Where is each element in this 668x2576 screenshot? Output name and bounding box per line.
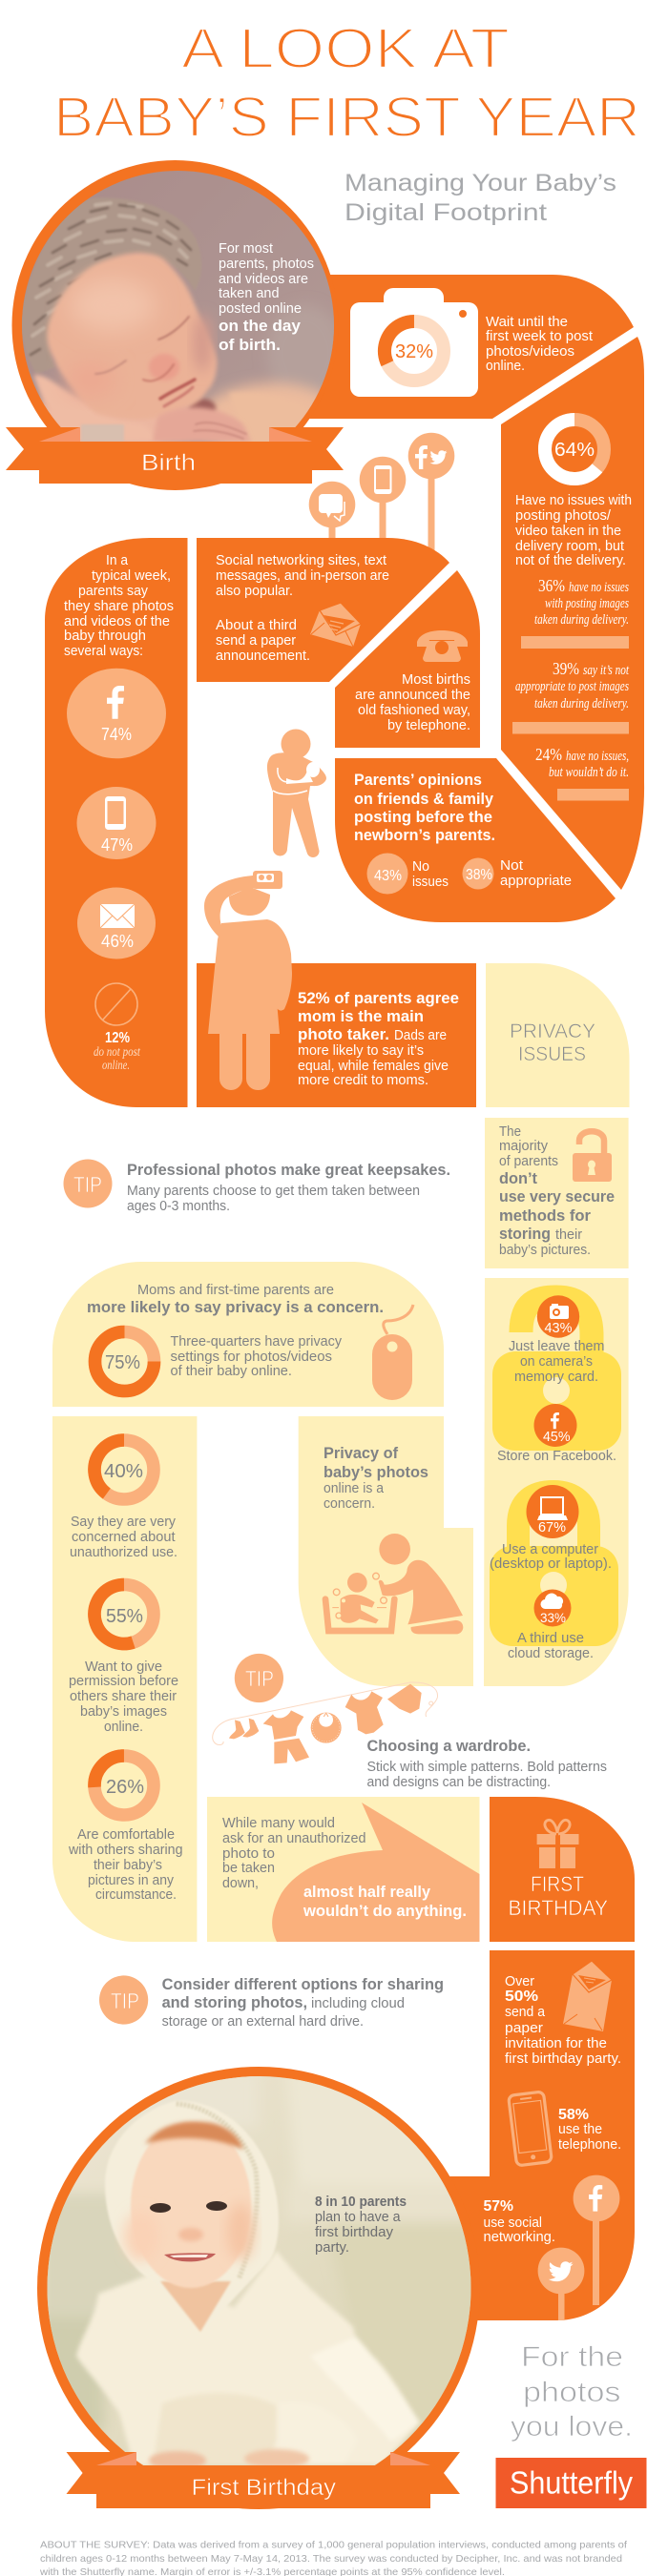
text: on the day of birth: For most <box>219 241 273 257</box>
panel: mom main photo taker <box>197 871 476 1107</box>
text: majority do not use secure: their <box>555 1227 582 1243</box>
text: wait until first week <box>486 315 593 374</box>
tagline: For the <box>521 2341 623 2373</box>
text: give permission: permission before <box>69 1674 178 1689</box>
tip: sharing and storing: including cloud <box>311 1996 405 2011</box>
stat: phone 47 <box>76 787 157 859</box>
text: wait until first week: first week to post <box>486 329 593 344</box>
text: majority do not use secure <box>499 1124 615 1258</box>
stat: 38 not appropriate: appropriate <box>500 874 572 889</box>
text: 8 in 10 parents: first birthday <box>315 2225 394 2240</box>
text: three-quarters: Three-quarters have privacy <box>170 1334 343 1350</box>
text: 57 percent social: 57% <box>483 2198 513 2215</box>
stat: memory card 43: memory card. <box>514 1370 598 1385</box>
text: wait until first week: Wait until the <box>486 315 568 330</box>
text: most births: by telephone. <box>387 718 470 733</box>
text: majority do not use secure: The <box>499 1124 521 1140</box>
text: privacy of photos <box>324 1445 428 1512</box>
chart: 75 donut: 75% <box>105 1352 140 1373</box>
text: most births: are announced the <box>355 688 470 703</box>
text: majority do not use secure: baby’s pictures. <box>499 1243 591 1258</box>
text: most births: Most births <box>402 672 470 688</box>
text: comfortable: circumstance. <box>95 1887 177 1903</box>
icon: camera <box>350 288 478 397</box>
text: 58 percent telephone <box>558 2107 621 2153</box>
tip: sharing and storing: Consider different options for sharing <box>162 1976 444 1993</box>
chart: 24 percent bar: 24% <box>535 745 562 764</box>
text: unauthorized use <box>70 1515 177 1560</box>
text: give permission: Want to give <box>85 1659 162 1675</box>
stat: cloud 33: A third use <box>517 1631 584 1646</box>
stat: mail 46: 46% <box>101 932 134 951</box>
text: privacy of photos: online is a <box>324 1481 385 1496</box>
text: social networking: announcement. <box>216 649 310 664</box>
text: on the day of birth: posted online <box>219 301 302 317</box>
tip badge: wardrobe: TIP <box>245 1666 274 1691</box>
panel: first birthday photo <box>37 2067 487 2509</box>
stat: memory card 43: 43% <box>544 1321 573 1336</box>
icon: yellow padlock two <box>490 1492 618 1646</box>
text: social networking: send a paper <box>216 633 296 649</box>
panel: storage options <box>484 1278 629 1686</box>
text: 8 in 10 parents: plan to have a <box>315 2210 401 2225</box>
icon: twitter lollipop <box>538 2248 584 2320</box>
text: over 50 percent: send a <box>505 2005 546 2020</box>
text: in a typical week <box>64 553 174 659</box>
stat: facebook 74 <box>67 669 166 758</box>
facial features <box>95 317 246 439</box>
banner: Birth <box>6 427 344 484</box>
panel: camera wait stat <box>286 275 634 419</box>
text: on the day of birth: parents, photos <box>219 257 314 272</box>
stat: cloud 33: cloud storage. <box>508 1646 594 1661</box>
text: more likely privacy concern <box>87 1283 384 1316</box>
panel: moms and first-time parents <box>52 1262 444 1407</box>
stat: 38 not appropriate: 38% <box>466 867 492 883</box>
text: wait until first week: photos/videos <box>486 344 574 360</box>
icon: parent holding baby <box>267 729 326 857</box>
text: most births: old fashioned way, <box>358 703 470 718</box>
chart: 39 percent bar: 39% <box>553 659 579 678</box>
text: no issues with posting: video taken in the <box>515 524 621 539</box>
text: privacy of photos: baby’s photos <box>324 1464 428 1481</box>
panel: privacy issues heading: ISSUES <box>518 1043 586 1065</box>
panel: first birthday heading: FIRST <box>531 1872 584 1896</box>
stat: computer 67 <box>490 1485 612 1572</box>
icon: facebook lollipop <box>574 2175 619 2305</box>
chart: 36 percent bar <box>521 576 629 649</box>
text: over 50 percent <box>505 1974 621 2067</box>
text: majority do not use secure: use very secure <box>499 1188 615 1206</box>
text: on the day of birth: and videos are <box>219 272 308 287</box>
arm and shoulder <box>34 375 310 442</box>
chart: 36 percent bar: with posting images <box>545 596 629 611</box>
text: 8 in 10 parents <box>315 2195 407 2256</box>
text: wait until first week: online. <box>486 359 525 374</box>
text: social networking: About a third <box>216 618 297 633</box>
chart: 39 percent bar: say it’s not <box>583 663 630 678</box>
stat: memory card 43: on camera’s <box>520 1354 593 1370</box>
chart: 36 percent bar: 36% <box>538 576 565 595</box>
text: almost half: wouldn’t do anything. <box>303 1903 467 1920</box>
text: give permission: baby’s images <box>80 1704 167 1720</box>
text: privacy of photos: concern. <box>324 1496 375 1512</box>
icon: gift <box>537 1820 578 1868</box>
icon: rotary telephone <box>417 630 468 662</box>
title: BABY’S FIRST YEAR <box>53 86 640 149</box>
text: 52 percent mom: mom is the main <box>298 1008 424 1025</box>
text: more likely privacy concern: Moms and first-time parents are <box>137 1283 334 1298</box>
panel: 64 percent delivery room <box>501 337 644 890</box>
tip: professional photos: ages 0-3 months. <box>127 1199 230 1214</box>
text: unauthorized use: unauthorized use. <box>70 1545 177 1560</box>
text: in a typical week: In a <box>106 553 129 568</box>
stat: cloud 33 <box>508 1589 594 1661</box>
heading: parents opinions: on friends & family <box>354 791 494 808</box>
text: many would ask: down, <box>222 1876 259 1891</box>
text: on the day of birth <box>219 241 314 354</box>
panel: telephone announcement <box>335 570 480 748</box>
text: over 50 percent: Over <box>505 1974 534 1989</box>
text: social networking <box>216 553 389 664</box>
chart: 40 donut: 40% <box>104 1461 143 1482</box>
tip text: wardrobe: Choosing a wardrobe. <box>366 1738 531 1755</box>
sweater <box>76 2251 420 2465</box>
text: in a typical week: several ways: <box>64 644 143 659</box>
footer: about the survey: ABOUT THE SURVEY: Data was derived from a survey of 1,000 general population interviews, conducted among parents of <box>40 2539 627 2550</box>
stat: mail 46 <box>77 887 156 959</box>
text: 8 in 10 parents: 8 in 10 parents <box>315 2195 407 2210</box>
text: on the day of birth: taken and <box>219 286 279 301</box>
text: no issues with posting: delivery room, but <box>515 539 624 554</box>
text: no issues with posting: Have no issues with <box>515 493 632 508</box>
panel: social networking <box>197 538 449 682</box>
text: more likely privacy concern: more likely to say privacy is a concern. <box>87 1299 384 1316</box>
stat: facebook 45 <box>497 1404 616 1464</box>
text: in a typical week: baby through <box>64 629 146 644</box>
icon: envelope <box>310 603 361 647</box>
banner: First Birthday: First Birthday <box>191 2475 336 2501</box>
subtitle: Managing Your Baby’s <box>344 170 616 196</box>
text: many would ask <box>222 1816 366 1891</box>
text: 58 percent telephone: telephone. <box>558 2137 621 2153</box>
tagline <box>511 2341 633 2442</box>
text: over 50 percent: paper <box>505 2021 543 2036</box>
text: 52 percent mom: Dads are <box>394 1028 447 1043</box>
text: many would ask: While many would <box>222 1816 335 1831</box>
icon: facebook and twitter lollipop <box>408 433 454 551</box>
stat: facebook 74: 74% <box>101 725 132 744</box>
text: give permission: others share their <box>70 1689 177 1704</box>
text: unauthorized use: Say they are very <box>71 1515 177 1530</box>
panel: privacy issues heading <box>486 963 630 1107</box>
tip: professional photos: Professional photos make great keepsakes. <box>127 1162 450 1179</box>
stat: facebook 45: 45% <box>543 1430 571 1445</box>
icon: invitation envelope <box>563 1961 612 2031</box>
text: three-quarters: of their baby online. <box>170 1364 292 1379</box>
chart: 64 donut <box>532 407 616 491</box>
chart: 40 donut <box>83 1429 165 1511</box>
tip: professional photos <box>63 1160 450 1214</box>
hands <box>149 2449 309 2470</box>
subtitle: Digital Footprint <box>344 199 547 226</box>
panel: parents opinions <box>335 758 616 922</box>
text: 52 percent mom: equal, while females give <box>298 1059 449 1074</box>
panel: weekly sharing ways <box>45 538 187 1107</box>
text: majority do not use secure: majority <box>499 1139 549 1154</box>
title <box>53 17 640 149</box>
stat: facebook 45: Store on Facebook. <box>497 1449 616 1464</box>
text: in a typical week: they share photos <box>64 599 174 614</box>
tip: professional photos: Many parents choose to get them taken between <box>127 1184 420 1199</box>
text: on the day of birth: of birth. <box>219 337 281 354</box>
panel: secure methods lock <box>485 1118 629 1268</box>
panel: privacy issues heading: PRIVACY <box>510 1020 595 1042</box>
tip: sharing and storing: storage or an external hard drive. <box>162 2014 364 2030</box>
text: over 50 percent: invitation for the <box>505 2036 607 2051</box>
stat: memory card 43 <box>509 1295 605 1385</box>
icon: phone lollipop <box>360 457 406 539</box>
hat <box>22 199 134 340</box>
panel: birth photo <box>11 160 344 490</box>
text: social networking: messages, and in-person are <box>216 568 389 584</box>
text: most births <box>355 672 470 733</box>
tip: professional photos: TIP <box>73 1172 102 1197</box>
subtitle <box>344 170 616 226</box>
face <box>124 2122 254 2288</box>
chart: 39 percent bar: taken during delivery. <box>534 696 629 711</box>
eyes and mouth <box>150 2201 227 2261</box>
text: almost half: almost half really <box>303 1884 431 1901</box>
neck <box>160 2281 231 2332</box>
text: in a typical week: typical week, <box>92 568 171 584</box>
text: 52 percent mom: more likely to say it’s <box>298 1043 424 1059</box>
stat: 43 no issues: issues <box>412 875 449 890</box>
chart: 39 percent bar: appropriate to post images <box>515 679 629 694</box>
text: majority do not use secure: methods for <box>499 1207 592 1225</box>
tip: sharing and storing: and storing photos, <box>162 1994 307 2011</box>
hood <box>105 2102 279 2305</box>
stat: do not post 12: do not post <box>94 1045 141 1060</box>
text: social networking: Social networking sites, text <box>216 553 386 568</box>
panel: first birthday heading: BIRTHDAY <box>508 1896 608 1920</box>
text: no issues with posting: not of the delivery. <box>515 553 626 568</box>
stat: 43 no issues: 43% <box>374 868 402 884</box>
stat: do not post 12: online. <box>102 1059 130 1073</box>
chart: 64 donut: 64% <box>554 440 595 461</box>
stat: do not post 12: 12% <box>105 1030 130 1046</box>
text: 57 percent social: networking. <box>483 2230 555 2245</box>
text: on the day of birth: on the day <box>219 318 302 335</box>
stat: cloud 33: 33% <box>540 1610 566 1625</box>
footer: about the survey <box>39 2539 627 2576</box>
text: privacy of photos: Privacy of <box>324 1445 398 1462</box>
text: comfortable: their baby’s <box>94 1858 162 1873</box>
banner: First Birthday <box>67 2452 460 2508</box>
text: majority do not use secure: don’t <box>499 1170 537 1187</box>
icon: clothesline <box>213 1682 438 1763</box>
icon: chat lollipop <box>309 482 355 539</box>
chart: 26 donut <box>93 1754 156 1817</box>
chart: 24 percent bar: but wouldn’t do it. <box>549 765 629 780</box>
text: 58 percent telephone: 58% <box>558 2107 589 2123</box>
chart: 36 percent bar: taken during delivery. <box>534 612 629 628</box>
chart: 24 percent bar: have no issues, <box>566 749 629 764</box>
stat: do not post 12 <box>94 983 141 1073</box>
text: 58 percent telephone: use the <box>558 2122 602 2137</box>
chart: 36 percent bar: have no issues <box>569 580 629 595</box>
text: give permission: online. <box>104 1720 143 1735</box>
stat: computer 67: Use a computer <box>502 1542 598 1557</box>
panel: privacy of baby's photos <box>299 1416 473 1686</box>
tip text: wardrobe <box>366 1738 607 1790</box>
footer: about the survey: children ages 0-12 months between May 7-May 14, 2013. The survey was conducted by Decipher, Inc. and was not branded <box>40 2553 622 2565</box>
tip: sharing and storing: TIP <box>111 1989 139 2013</box>
text: comfortable: Are comfortable <box>77 1827 175 1843</box>
text: many would ask: photo to <box>222 1846 275 1862</box>
tip text: wardrobe: Stick with simple patterns. Bold patterns <box>366 1760 607 1775</box>
text: 52 percent mom: photo taker. <box>298 1026 389 1043</box>
text: give permission <box>69 1659 178 1735</box>
heading: parents opinions <box>354 772 495 844</box>
text: social networking: also popular. <box>216 584 293 599</box>
stat: 43 no issues: No <box>412 859 429 875</box>
tip: sharing and storing <box>99 1975 444 2030</box>
face <box>47 253 251 442</box>
icon: mom taking photo <box>204 871 292 1090</box>
text: 52 percent mom: more credit to moms. <box>298 1073 428 1088</box>
logo: Shutterfly <box>496 2458 647 2508</box>
logo: Shutterfly: Shutterfly <box>510 2464 633 2501</box>
text: unauthorized use: concerned about <box>72 1530 176 1545</box>
chart: 24 percent bar <box>535 745 629 801</box>
icon: camera: 32% <box>395 341 433 362</box>
tip badge: wardrobe <box>235 1654 283 1702</box>
stat: computer 67: (desktop or laptop). <box>490 1556 612 1572</box>
stat: computer 67: 67% <box>538 1520 566 1535</box>
stat: memory card 43: Just leave them <box>509 1339 605 1354</box>
text: many would ask: be taken <box>222 1861 275 1876</box>
text: over 50 percent: 50% <box>505 1989 538 2005</box>
text: many would ask: ask for an unauthorized <box>222 1831 366 1846</box>
tip text: wardrobe: and designs can be distracting. <box>366 1775 551 1790</box>
icon: open padlock <box>573 1131 612 1182</box>
icon: yellow padlock one <box>492 1297 621 1451</box>
speech bubble <box>272 1803 479 1942</box>
text: 57 percent social: use social <box>483 2215 542 2231</box>
tagline: you love. <box>511 2411 633 2442</box>
text: three-quarters: settings for photos/videos <box>170 1350 332 1365</box>
text: 57 percent social <box>483 2198 555 2245</box>
text: almost half <box>303 1884 467 1920</box>
heading: parents opinions: posting before the <box>354 809 492 826</box>
text: majority do not use secure: storing <box>499 1226 551 1243</box>
text: three-quarters <box>170 1334 343 1379</box>
heading: parents opinions: Parents’ opinions <box>354 772 482 789</box>
text: no issues with posting: posting photos/ <box>515 508 612 524</box>
text: 8 in 10 parents: party. <box>315 2240 349 2256</box>
text: in a typical week: parents say <box>78 584 149 599</box>
stat: 43 no issues <box>366 853 449 895</box>
title: A LOOK AT <box>181 17 510 80</box>
chart: 75 donut <box>95 1331 155 1391</box>
banner: Birth: Birth <box>141 450 196 476</box>
text: majority do not use secure: of parents <box>499 1154 558 1169</box>
chart: 39 percent bar <box>512 659 630 734</box>
chart: 55 donut <box>87 1577 161 1652</box>
text: 52 percent mom: 52% of parents agree <box>298 990 459 1007</box>
chart: 26 donut: 26% <box>106 1777 144 1798</box>
panel: unauthorized photo callout <box>207 1797 479 1942</box>
text: over 50 percent: first birthday party. <box>505 2051 621 2067</box>
chart: 55 donut: 55% <box>106 1606 143 1627</box>
stat: 38 not appropriate: Not <box>500 858 523 874</box>
text: 52 percent mom <box>298 990 459 1088</box>
panel: first birthday heading <box>490 1797 635 1942</box>
icon: computer mouse <box>372 1305 413 1400</box>
text: in a typical week: and videos of the <box>64 614 170 629</box>
icon: parent bathing baby <box>325 1534 463 1634</box>
text: comfortable: with others sharing <box>68 1843 183 1858</box>
panel: privacy concern stats <box>52 1416 197 1942</box>
heading: parents opinions: newborn’s parents. <box>354 827 495 844</box>
stat: phone 47: 47% <box>101 835 133 855</box>
icon: phone outline <box>509 2092 552 2166</box>
text: no issues with posting <box>515 493 632 568</box>
panel: birthday plans <box>420 1950 635 2320</box>
text: comfortable <box>68 1827 183 1903</box>
stat: 38 not appropriate <box>462 858 572 889</box>
text: comfortable: pictures in any <box>88 1873 175 1888</box>
tagline: photos <box>523 2377 620 2408</box>
